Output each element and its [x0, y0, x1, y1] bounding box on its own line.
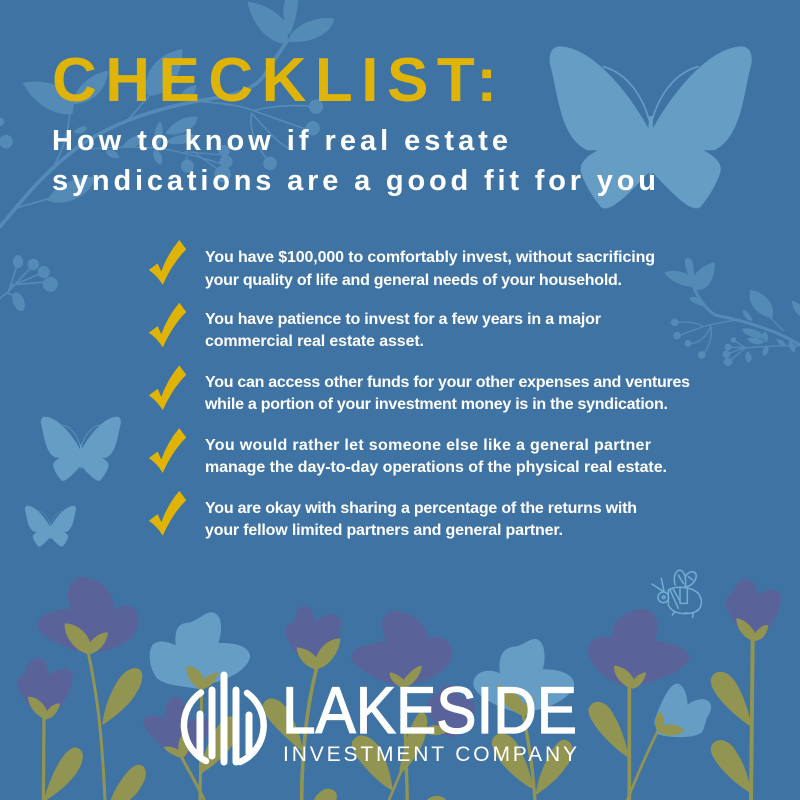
logo	[184, 673, 577, 766]
decoration: large butterfly	[550, 47, 751, 208]
icon: bee	[652, 570, 701, 617]
flower 10	[712, 580, 780, 800]
subtitle: How to know if real estate	[52, 125, 508, 157]
flower 2	[18, 659, 82, 800]
item 2: commercial real estate asset.	[205, 333, 424, 350]
subtitle	[52, 125, 656, 197]
item 2	[150, 303, 601, 350]
title: CHECKLIST:	[52, 46, 497, 115]
flower 3	[150, 613, 249, 800]
item 1: You have $100,000 to comfortably invest, without sacrificing	[205, 249, 655, 266]
flower 7: small purple	[423, 685, 474, 737]
item 4	[150, 429, 667, 476]
item 5: your fellow limited partners and general partner.	[205, 522, 563, 539]
flower 5	[263, 607, 340, 800]
item 1: your quality of life and general needs of your household.	[205, 272, 622, 289]
logo tagline: INVESTMENT COMPANY	[283, 743, 577, 766]
logo mark	[184, 675, 264, 762]
item 5: You are okay with sharing a percentage of the returns with	[205, 500, 637, 517]
flower 9	[589, 610, 710, 800]
item 1	[150, 241, 655, 289]
decoration: top-left branch	[0, 0, 333, 227]
checklist	[150, 241, 690, 539]
flower 8	[428, 640, 573, 800]
decoration: left berry sprig	[0, 256, 57, 312]
decoration: medium butterfly	[41, 417, 121, 481]
item 3: You can access other funds for your other expenses and ventures	[205, 374, 690, 391]
item 2: You have patience to invest for a few years in a major	[205, 311, 601, 328]
decoration: small butterfly	[25, 506, 76, 546]
flowers	[18, 578, 780, 800]
item 5	[150, 492, 637, 539]
subtitle: syndications are a good fit for you	[52, 165, 656, 197]
item 4: manage the day-to-day operations of the physical real estate.	[205, 459, 667, 476]
item 3: while a portion of your investment money is in the syndication.	[204, 396, 668, 413]
item 3	[150, 366, 690, 413]
logo wordmark: LAKESIDE	[282, 673, 577, 747]
decoration: right branch	[665, 259, 800, 365]
flower 1	[38, 578, 145, 800]
flower 4	[144, 698, 208, 800]
item 4: You would rather let someone else like a general partner	[205, 437, 651, 454]
flower 6	[352, 612, 452, 800]
